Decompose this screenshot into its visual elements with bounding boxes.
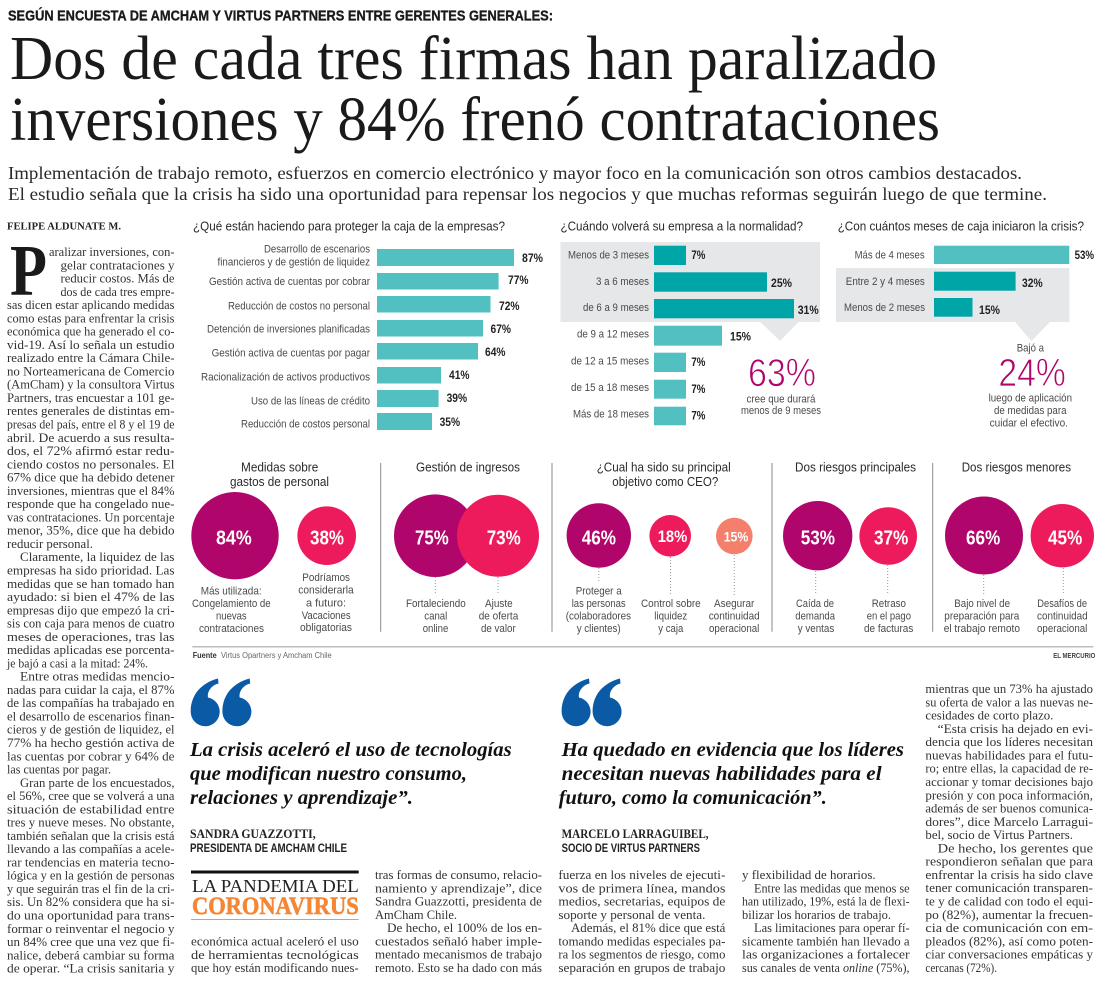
text block: column 1: empresas dijo que empezó la cri-: [7, 602, 174, 617]
text block: column 1: vid-19. Así lo señala un estudio: [7, 337, 175, 352]
bar labels: Racionalización de activos productivos: [201, 372, 370, 384]
bubble: 38%: [297, 506, 356, 565]
bar values: 35%: [440, 417, 460, 429]
text block: column 1: de operar. “La crisis sanitaria y: [7, 961, 175, 976]
pull quote 1: [189, 740, 512, 809]
pull quote 2: Ha quedado en evidencia que los líderes: [561, 740, 904, 761]
text block: column 5: sicamente también han llevado a: [742, 933, 910, 948]
caption: ajuste de oferta de valor: [479, 598, 519, 635]
pull quote 1: que modifican nuestro consumo,: [190, 764, 467, 785]
text block: column 3: mentado mecanismos de trabajo: [375, 947, 542, 962]
caption: retraso en el pago: de facturas: [864, 623, 914, 635]
caption: proteger a las personas: (colaboradores: [566, 610, 631, 622]
pull quote 1: La crisis aceleró el uso de tecnologías: [189, 740, 512, 761]
text block: column 6: respondieron señalan que para: [925, 854, 1093, 869]
text block: column 4: fuerza en los niveles de ejecuti-: [558, 867, 725, 882]
text block: column 1: un 84% cree que una vez que fi-: [7, 934, 174, 949]
heading: Dos riesgos principales: [795, 460, 916, 474]
caption: más utilizada: [192, 586, 271, 635]
bar labels: Entre 2 y 4 meses: [846, 276, 925, 288]
subheading: El estudio señala que la crisis ha sido una oportunidad para repensar los negocios y que muchas reformas seguirán luego de que termine.: [8, 184, 1047, 204]
heading: [597, 460, 731, 489]
text block: column 3: cuestados señaló haber imple-: [375, 933, 542, 948]
text block: column 1: nadas para cuidar la caja, el 87%: [7, 682, 175, 697]
caption: desafíos de continuidad: Desafíos de: [1037, 598, 1087, 610]
callout: 24%: cuidar el efectivo.: [990, 418, 1068, 430]
caption: ajuste de oferta de valor: de valor: [481, 623, 516, 635]
caption: proteger a las personas: y clientes): [577, 623, 621, 635]
text block: column 1: medidas aplicadas ese porcenta-: [7, 642, 175, 657]
bubble: 66%: 66%: [966, 528, 1000, 550]
text block: column 1: formar o reinventar el negocio y: [7, 921, 175, 936]
text block: column 6: enfrentar la crisis ha sido clave: [925, 867, 1093, 882]
text block: column 1: Claramente, la liquidez de las: [20, 549, 174, 564]
bar labels: Reducción de costos personal: [241, 418, 370, 430]
bubble: 66%: [945, 496, 1023, 574]
chart heading: ¿Qué están haciendo para proteger la caja de la empresas?: [193, 220, 505, 234]
text block: column 4: [558, 867, 726, 975]
text block: column 6: po (82%), aumentar la frecuen-: [925, 907, 1093, 922]
text block: column 3: [375, 867, 542, 975]
bar chart: months of cash: [836, 220, 1094, 430]
text block: column 4: separación en grupos de trabajo: [558, 960, 725, 975]
text block: column 1: de las compañías ha trabajado en: [7, 695, 175, 710]
text block: column 1: también señalan que la crisis está: [7, 828, 175, 843]
bar values: 41%: [449, 370, 470, 382]
bubble: 37%: [859, 507, 917, 565]
caption: asegurar continuidad: operacional: [709, 623, 759, 635]
bar chart: protecting cash: [193, 220, 543, 430]
text block: column 1: 67% dice que ha debido detener: [7, 470, 175, 485]
bar values: 7%: [691, 250, 705, 262]
bubble: 53%: 53%: [801, 528, 835, 550]
bubble: 53%: [783, 501, 852, 570]
text block: column 1: aralizar inversiones, con-: [49, 244, 174, 259]
text block: column 1: y que seguirán tras el fin de la cri-: [7, 881, 174, 896]
text block: column 1: do una oportunidad para trans-: [7, 908, 174, 922]
source line: Fuente: [193, 651, 217, 660]
text block: column 1: las cuentas por cobrar y 64% de: [7, 748, 175, 763]
caption: caída de demanda: demanda: [795, 610, 836, 622]
caption: desafíos de continuidad: operacional: [1037, 623, 1087, 635]
text block: column 6: cercanas (72%).: [925, 960, 997, 975]
text block: column 3: Sandra Guazzotti, presidenta de: [375, 894, 542, 909]
text block: column 1: cieros y de gestión de liquidez, el: [7, 722, 175, 737]
subheading: [8, 163, 1047, 204]
panel: dos riesgos menores: [944, 460, 1094, 635]
heading: ¿Cual ha sido su principal: [597, 460, 731, 474]
text block: column 1: tres y nueve meses. No obstante,: [7, 815, 174, 830]
bubble: 46%: [567, 503, 631, 568]
text block: column 1: ciendo costos no personales. El: [7, 456, 175, 471]
pull quote 2: futuro, como la comunicación”.: [559, 788, 827, 809]
icon: blue quotation marks 1: [191, 678, 251, 726]
caption: control sobre liquidez: Control sobre: [641, 598, 701, 610]
text block: column 3: AmCham Chile.: [375, 907, 457, 922]
caption: caída de demanda: [795, 598, 836, 635]
bar labels: Gestión activa de cuentas por cobrar: [209, 276, 370, 288]
bar labels: Gestión activa de cuentas por pagar: [212, 348, 370, 360]
bubble: 15%: [716, 518, 753, 554]
text block: column 4: tomando medidas especiales pa-: [558, 933, 725, 948]
caption: asegurar continuidad: [709, 598, 760, 635]
bubble: 73%: 73%: [487, 528, 521, 550]
section logo: la pandemia del coronavirus: [191, 870, 359, 920]
text block: column 1: Gran parte de los encuestados,: [20, 775, 174, 790]
bar labels: Más de 18 meses: [573, 408, 649, 420]
grey highlight panel with pointer: [560, 242, 820, 341]
text block: column 1: responde que ha congelado nue-: [7, 496, 174, 511]
subheading: Implementación de trabajo remoto, esfuerzos en comercio electrónico y mayor foco en la comunicación son otros cambios destacados.: [8, 163, 1022, 183]
caption: podríamos considerarla: [298, 572, 355, 634]
text block: column 6: cesidades de corto plazo.: [925, 708, 1053, 723]
icon: blue quotation marks 2: [562, 678, 622, 726]
text block: column 1: Entre otras medidas mencio-: [20, 669, 174, 684]
title: inversiones y 84% frenó contrataciones: [10, 86, 940, 154]
caption: bajo nivel de preparación: Bajo nivel de: [954, 598, 1010, 610]
chart heading: ¿Cuándo volverá su empresa a la normalidad?: [560, 220, 803, 234]
text block: column 4: Además, el 81% dice que está: [571, 920, 726, 935]
heading: Medidas sobre: [241, 460, 318, 474]
bar values: 77%: [508, 275, 528, 287]
bar labels: Reducción de costos no personal: [228, 300, 370, 312]
caption: desafíos de continuidad: [1037, 598, 1088, 635]
text block: column 1: las cuentas por pagar.: [7, 762, 111, 776]
bar labels: Desarrollo de escenarios: [264, 244, 370, 256]
bar labels: 3 a 6 meses: [596, 276, 649, 288]
bar labels: [201, 244, 370, 430]
bar values: 15%: [979, 305, 1000, 317]
caption: control sobre liquidez: y caja: [658, 623, 684, 635]
panel: dos riesgos principales: [783, 460, 917, 635]
caption: caída de demanda: Caída de: [796, 598, 834, 610]
bubble: 45%: [1031, 504, 1094, 567]
bubble: 37%: 37%: [874, 528, 908, 550]
heading: [230, 460, 329, 489]
caption: fortaleciendo canal online: Fortaleciendo: [406, 598, 466, 610]
bar chart: return to normality: [560, 220, 821, 425]
bar values: 53%: [1075, 250, 1094, 262]
bar values: 32%: [1022, 278, 1043, 290]
text block: column 6: presión y con poca información,: [925, 787, 1093, 802]
text block: column 5: sus canales de venta online (75%),: [742, 960, 910, 975]
text block: column 2: que hoy están modificando nues-: [191, 960, 359, 975]
bar labels: Uso de las líneas de crédito: [251, 396, 370, 408]
text block: column 1: el 56%, cree que se volverá a una: [7, 788, 175, 803]
caption: podríamos considerarla: Vacaciones: [302, 610, 351, 622]
text block: column 6: mientras que un 73% ha ajustado: [925, 681, 1093, 696]
quote attribution 2: [562, 827, 709, 855]
panel: objetivo como CEO: [566, 460, 760, 635]
text block: column 1: sis. Un 82% considera que ha si-: [7, 894, 174, 909]
caption: caída de demanda: y ventas: [798, 623, 835, 635]
caption: control sobre liquidez: [641, 598, 701, 635]
text block: column 1: no Norteamericana de Comercio: [7, 363, 174, 378]
bar labels: de 9 a 12 meses: [577, 328, 649, 340]
text block: column 6: pleados (82%), así como poten-: [925, 933, 1093, 948]
text block: column 6: De hecho, los gerentes que: [938, 840, 1093, 855]
bar labels: [568, 250, 649, 420]
text block: column 6: tener comunicación transparen-: [925, 880, 1093, 895]
bar labels: Detención de inversiones planificadas: [207, 324, 370, 336]
bubble: 18%: [649, 515, 691, 557]
bar values: 87%: [522, 253, 543, 265]
bar values: [691, 250, 819, 423]
caption: fortaleciendo canal online: [406, 598, 466, 635]
text block: column 6: dencia que los líderes necesitan: [925, 734, 1093, 749]
text block: column 5: [742, 867, 910, 975]
callout: 63%: menos de 9 meses: [741, 405, 821, 417]
caption: proteger a las personas: Proteger a: [576, 586, 622, 598]
bar labels: Más de 4 meses: [855, 250, 925, 262]
text block: column 3: tras formas de consumo, relacio-: [375, 867, 542, 882]
callout: 63%: 63%: [748, 352, 816, 395]
text block: column 1: llevando a las compañías a acele-: [7, 841, 174, 856]
bar labels: de 15 a 18 meses: [571, 382, 649, 394]
text block: column 6: ro; entre ellas, la capacidad de re-: [925, 761, 1093, 776]
text block: column 5: las organizaciones a fortalecer: [742, 947, 910, 962]
text block: column 6: cia de comunicación con em-: [925, 920, 1093, 935]
caption: fortaleciendo canal online: online: [423, 623, 448, 635]
text block: column 1: nalice, deberá cambiar su forma: [7, 947, 175, 962]
text block: column 5: y flexibilidad de horarios.: [742, 867, 876, 882]
caption: fortaleciendo canal online: canal: [424, 610, 447, 622]
heading: objetivo como CEO?: [612, 475, 718, 489]
text block: column 4: medios, secretarias, equipos de: [558, 894, 726, 909]
text block: column 1: empresas ha sido prioridad. Las: [7, 562, 175, 578]
text block: column 1: inversiones, mientras que el 84%: [7, 483, 175, 498]
text block: column 1: situación de estabilidad entre: [7, 801, 175, 816]
heading: Dos riesgos menores: [962, 460, 1071, 474]
text block: column 5: Entre las medidas que menos se: [754, 880, 910, 895]
callout: 24%: Bajó a: [1017, 342, 1045, 354]
caption: más utilizada: nuevas: [216, 610, 247, 622]
bubble: 15%: 15%: [724, 529, 749, 545]
bar labels: financieros y de gestión de liquidez: [218, 256, 370, 268]
text block: column 1: rentes generales de distintas em-: [7, 403, 174, 418]
text block: column 3: De hecho, el 100% de los en-: [387, 920, 542, 935]
bar values: 7%: [691, 411, 705, 423]
bubble: 45%: 45%: [1048, 528, 1082, 550]
bar values: [440, 253, 543, 429]
chart heading: ¿Con cuántos meses de caja iniciaron la crisis?: [838, 220, 1084, 234]
caption: proteger a las personas: [566, 586, 631, 635]
bar values: 25%: [771, 278, 792, 290]
text block: column 6: además de ser buenos comunica-: [925, 800, 1093, 816]
pull quote 2: necesitan nuevas habilidades para el: [562, 764, 882, 785]
caption: más utilizada: Congelamiento de: [192, 598, 271, 610]
bars: [654, 246, 794, 425]
caption: asegurar continuidad: continuidad: [709, 610, 760, 622]
panel: gestión de ingresos: [394, 460, 539, 635]
text block: column 1: meses de operaciones, tras las: [7, 629, 174, 644]
text block: column 2: económica actual aceleró el uso: [191, 934, 359, 948]
caption: podríamos considerarla: obligatorias: [300, 622, 352, 634]
bar values: 15%: [730, 332, 751, 344]
bar values: 7%: [691, 357, 705, 369]
text block: column 6: dores”, dice Marcelo Larragui-: [925, 814, 1093, 829]
text block: column 5: bilizar los horarios de trabajo.: [742, 907, 891, 922]
text block: column 1: rar tendencias en materia tecno-: [7, 854, 175, 869]
bar values: 72%: [499, 301, 520, 313]
text block: column 4: vos de primera línea, mandos: [558, 880, 725, 895]
text block: column 4: ra los segmentos de riesgo, como: [558, 947, 725, 962]
caption: ajuste de oferta de valor: Ajuste: [485, 598, 513, 610]
quote attribution 2: SOCIO DE VIRTUS PARTNERS: [562, 843, 700, 855]
text block: column 5: han utilizado, 19%, está la de flexi-: [742, 894, 910, 909]
caption: ajuste de oferta de valor: de oferta: [479, 610, 519, 622]
text block: column 2: [191, 934, 359, 975]
text block: column 1: menor, 35%, dice que ha debido: [7, 523, 175, 538]
caption: control sobre liquidez: liquidez: [654, 610, 687, 622]
text block: column 1: vas contrataciones. Un porcentaje: [7, 509, 175, 524]
text block: column 1: dos, el 72% afirmó estar redu-: [7, 443, 174, 458]
text block: column 1: sis con caja para menos de cuatro: [7, 616, 174, 631]
callout: 24%: [989, 342, 1072, 430]
caption: bajo nivel de preparación: el trabajo remoto: [944, 623, 1020, 635]
bars: [934, 246, 1069, 317]
text block: column 1: lógica y en la gestión de personas: [7, 868, 174, 883]
bubble: 38%: 38%: [310, 528, 344, 550]
text block: column 1: dos de cada tres empre-: [60, 284, 174, 299]
text block: column 4: soporte y personal de venta.: [558, 907, 705, 922]
text block: column 1: je bajó a casi a la mitad: 24%.: [6, 655, 148, 670]
caption: retraso en el pago: en el pago: [867, 610, 911, 622]
byline: FELIPE ALDUNATE M.: [7, 222, 122, 232]
caption: retraso en el pago: [864, 598, 914, 635]
text block: column 1: económica que ha generado el co-: [7, 324, 174, 339]
pull quote 1: relaciones y aprendizaje”.: [190, 788, 413, 809]
text block: column 1: reducir personal.: [7, 536, 93, 551]
bubble: 73%: [457, 495, 539, 577]
text block: column 1: reducir costos. Más de: [60, 270, 175, 286]
text block: column 1: sas dicen estar aplicando medidas: [7, 297, 174, 312]
quote attribution 2: MARCELO LARRAGUIBEL,: [562, 827, 709, 841]
section logo: la pandemia del coronavirus: CORONAVIRUS: [192, 893, 359, 920]
caption: podríamos considerarla: Podríamos: [302, 572, 350, 584]
bubble: 75%: 75%: [415, 528, 449, 550]
heading: gastos de personal: [230, 475, 329, 489]
bar labels: de 12 a 15 meses: [571, 356, 649, 368]
bar values: 64%: [485, 347, 506, 359]
text block: column 6: “Esta crisis ha dejado en evi-: [938, 721, 1093, 736]
bar values: 7%: [691, 384, 705, 396]
bubble: 84%: 84%: [216, 528, 252, 550]
caption: asegurar continuidad: Asegurar: [714, 598, 755, 610]
caption: retraso en el pago: Retraso: [872, 598, 906, 610]
bar values: 39%: [447, 393, 467, 405]
section logo: la pandemia del coronavirus: LA PANDEMIA DEL: [192, 876, 359, 896]
text block: column 1: presas del país, entre el 8 y el 19 de: [7, 416, 175, 432]
drop cap: P: [10, 230, 47, 311]
bar labels: Menos de 3 meses: [568, 250, 649, 262]
text block: column 1: Partners, tras encuestar a 101 ge-: [7, 390, 174, 405]
caption: podríamos considerarla: a futuro:: [306, 598, 346, 610]
quote attribution 1: PRESIDENTA DE AMCHAM CHILE: [190, 843, 347, 855]
callout: 24%: 24%: [998, 352, 1066, 395]
bar labels: [844, 250, 925, 314]
text block: column 1: gelar contrataciones y: [60, 257, 175, 272]
bar labels: de 6 a 9 meses: [583, 302, 649, 314]
text block: column 1: como estas para enfrentar la crisis: [7, 310, 174, 325]
text block: column 6: te y de calidad con todo el equi-: [925, 894, 1093, 908]
caption: más utilizada: Más utilizada:: [201, 586, 262, 598]
text block: column 1: (AmCham) y la consultora Virtus: [7, 377, 174, 392]
text block: column 5: Las limitaciones para operar fí-: [754, 920, 910, 935]
caption: desafíos de continuidad: continuidad: [1037, 610, 1088, 622]
text block: column 1: medidas que se han tomado han: [7, 576, 175, 591]
title: Dos de cada tres firmas han paralizado: [10, 25, 937, 93]
bubble: 84%: [191, 492, 279, 579]
bubble: 46%: 46%: [582, 528, 616, 550]
pull quote 2: [559, 740, 904, 809]
text block: column 6: bel, socio de Virtus Partners.: [925, 827, 1073, 842]
bar values: 31%: [798, 305, 819, 317]
callout: 63%: cree que durará: [746, 394, 816, 406]
text block: column 6: ciar conversaciones empáticas y: [925, 947, 1093, 962]
callout: 63%: [741, 352, 821, 417]
text block: column 1: [6, 244, 175, 976]
bars: [377, 249, 514, 430]
text block: column 3: namiento y aprendizaje”, dice: [375, 880, 542, 895]
bar values: [979, 250, 1094, 317]
text block: column 1: ayudado: si bien el 47% de las: [7, 589, 174, 604]
caption: bajo nivel de preparación: preparación para: [944, 610, 1020, 622]
caption: podríamos considerarla: considerarla: [298, 584, 355, 596]
quote attribution 1: [190, 827, 347, 855]
text block: column 1: abril. De acuerdo a sus resulta-: [7, 430, 175, 445]
heading: Gestión de ingresos: [416, 460, 520, 474]
text block: column 2: de herramientas tecnológicas: [191, 947, 359, 962]
caption: bajo nivel de preparación: [944, 598, 1020, 635]
title: [10, 25, 940, 154]
bubble: 18%: 18%: [658, 527, 687, 546]
bar values: 67%: [490, 324, 511, 336]
kicker: SEGÚN ENCUESTA DE AMCHAM Y VIRTUS PARTNERS ENTRE GERENTES GENERALES:: [8, 7, 553, 25]
text block: column 6: accionar y tomar decisiones bajo: [925, 774, 1093, 789]
text block: column 3: remoto. Esto se ha dado con más: [375, 960, 542, 975]
caption: más utilizada: contrataciones: [199, 623, 264, 635]
callout: 24%: luego de aplicación: [989, 392, 1072, 404]
bar labels: Menos de 2 meses: [844, 302, 925, 314]
bubble: 75%: [394, 494, 477, 577]
grey highlight panel with pointer: [836, 268, 1069, 341]
text block: column 6: nuevas habilidades para el futu-: [925, 747, 1093, 762]
text block: column 6: [925, 681, 1093, 975]
text block: column 1: el desarrollo de escenarios finan-: [7, 708, 174, 724]
quote attribution 1: SANDRA GUAZZOTTI,: [190, 827, 316, 841]
source line: Virtus Opartners y Amcham Chile: [221, 651, 332, 660]
callout: 24%: de medidas para: [994, 405, 1067, 417]
text block: column 1: 77% ha hecho gestión activa de: [7, 735, 175, 750]
caption: proteger a las personas: las personas: [572, 598, 626, 610]
text block: column 6: su oferta de valor a las nuevas ne-: [925, 694, 1093, 709]
panel: medidas sobre gastos de personal: [191, 460, 356, 635]
text block: column 1: realizado entre la Cámara Chile-: [7, 350, 174, 365]
